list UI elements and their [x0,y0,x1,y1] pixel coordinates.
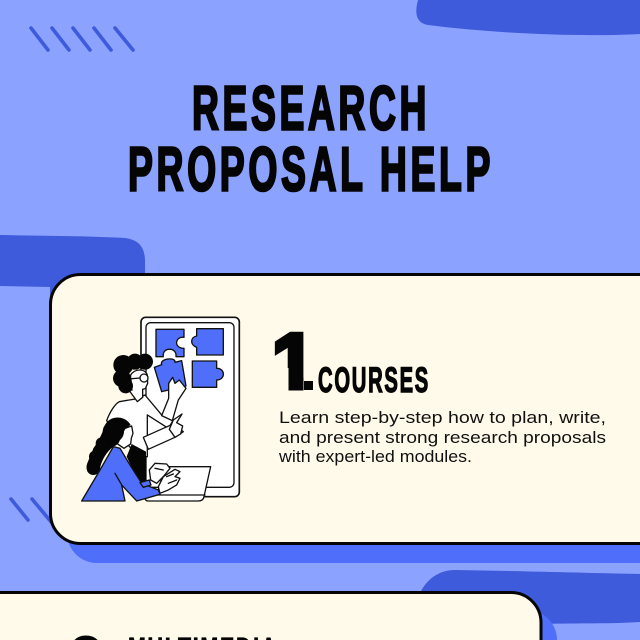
body text: Learn step-by-step how to plan, write, [279,408,606,427]
body text: with expert-led modules. [278,447,472,466]
top right blob [416,0,640,35]
card shadow 1 [67,300,640,563]
left dashes [11,499,52,523]
tablet [141,317,239,497]
title [128,74,494,204]
illustration: people solving puzzle on tablet [82,317,239,501]
man trousers [127,444,146,485]
card shadow 2 [0,610,557,640]
title: RESEARCH [192,74,430,144]
hands [149,463,180,493]
panel: courses [50,274,640,544]
body text: and present strong research proposals [279,428,606,447]
puzzle pieces [154,329,223,392]
left blob [0,235,145,295]
heading: number 1: 1 [272,317,315,405]
laptop [145,467,211,501]
body text [278,408,606,466]
top dashes [31,28,133,50]
panel: multimedia [0,592,541,640]
heading: courses: COURSES [318,361,430,400]
bottom right blob [417,570,640,624]
woman [82,417,160,501]
man [107,354,186,457]
